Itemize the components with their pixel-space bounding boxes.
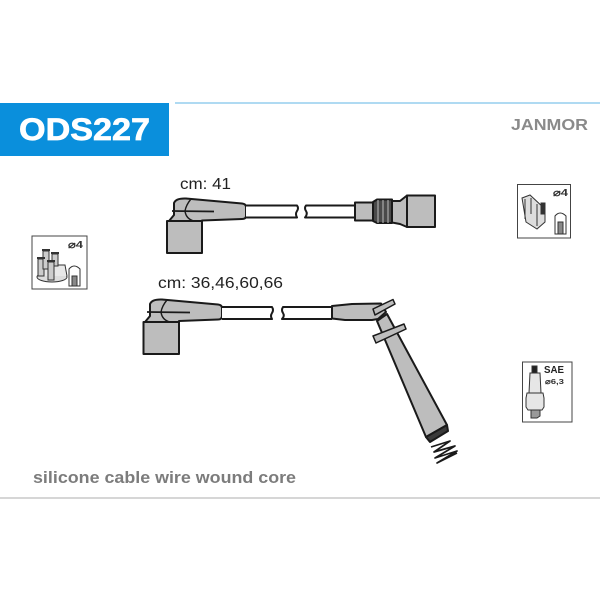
threaded plug tip (426, 425, 448, 442)
lower flange (373, 324, 406, 343)
fitment icon: distributor cap left (32, 236, 87, 289)
angled boot connector (144, 299, 222, 354)
bottom cable (144, 299, 457, 463)
diameter label: ⌀4 (553, 188, 569, 199)
title badge (0, 103, 169, 156)
length label: bottom cable: cm: 36,46,60,66 (158, 275, 283, 292)
diameter label: ⌀4 (68, 240, 84, 251)
angled boot connector (167, 198, 246, 253)
fitment icon: distributor cap top right (518, 184, 570, 238)
length label: top cable: cm: 41 (180, 176, 231, 193)
SAE label: SAE (544, 364, 564, 376)
upper flange (373, 300, 395, 315)
wire right segment (305, 206, 355, 218)
brand name: JANMOR (511, 117, 588, 134)
plug tube (377, 314, 447, 437)
wire right segment (282, 307, 332, 319)
wire left segment (246, 206, 298, 218)
spring (431, 441, 457, 463)
title badge: ODS227 (19, 111, 150, 147)
straight connector (355, 196, 435, 227)
wire left segment (222, 307, 273, 319)
top cable (167, 196, 435, 253)
angled plug boot (332, 304, 386, 320)
fitment icon: spark plug SAE (522, 362, 572, 422)
diameter label: ⌀6,3 (545, 377, 564, 386)
product description: silicone cable wire wound core (33, 469, 296, 487)
